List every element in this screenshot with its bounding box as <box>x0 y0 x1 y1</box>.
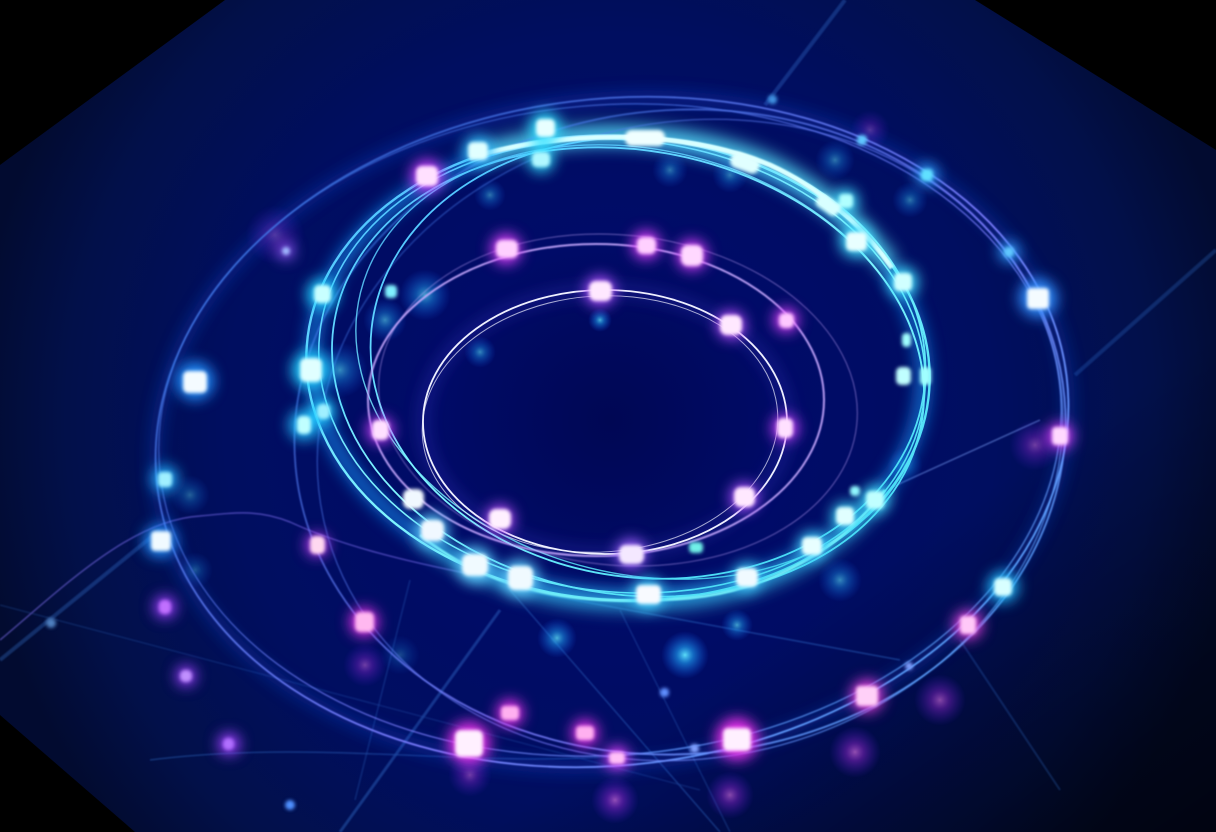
bright arc at top of ring <box>470 137 892 268</box>
node halos: magenta <box>154 160 1073 770</box>
ring glow halo <box>117 46 1107 818</box>
teal main rings <box>291 87 971 642</box>
outer rings <box>117 46 1123 829</box>
middle violet ring <box>362 211 874 589</box>
bottom cyan ring highlight <box>420 490 885 601</box>
blurred reflections <box>170 110 1061 824</box>
node halos: cyan <box>144 112 1057 610</box>
light nodes <box>46 95 1068 810</box>
inner white ring <box>414 284 787 564</box>
